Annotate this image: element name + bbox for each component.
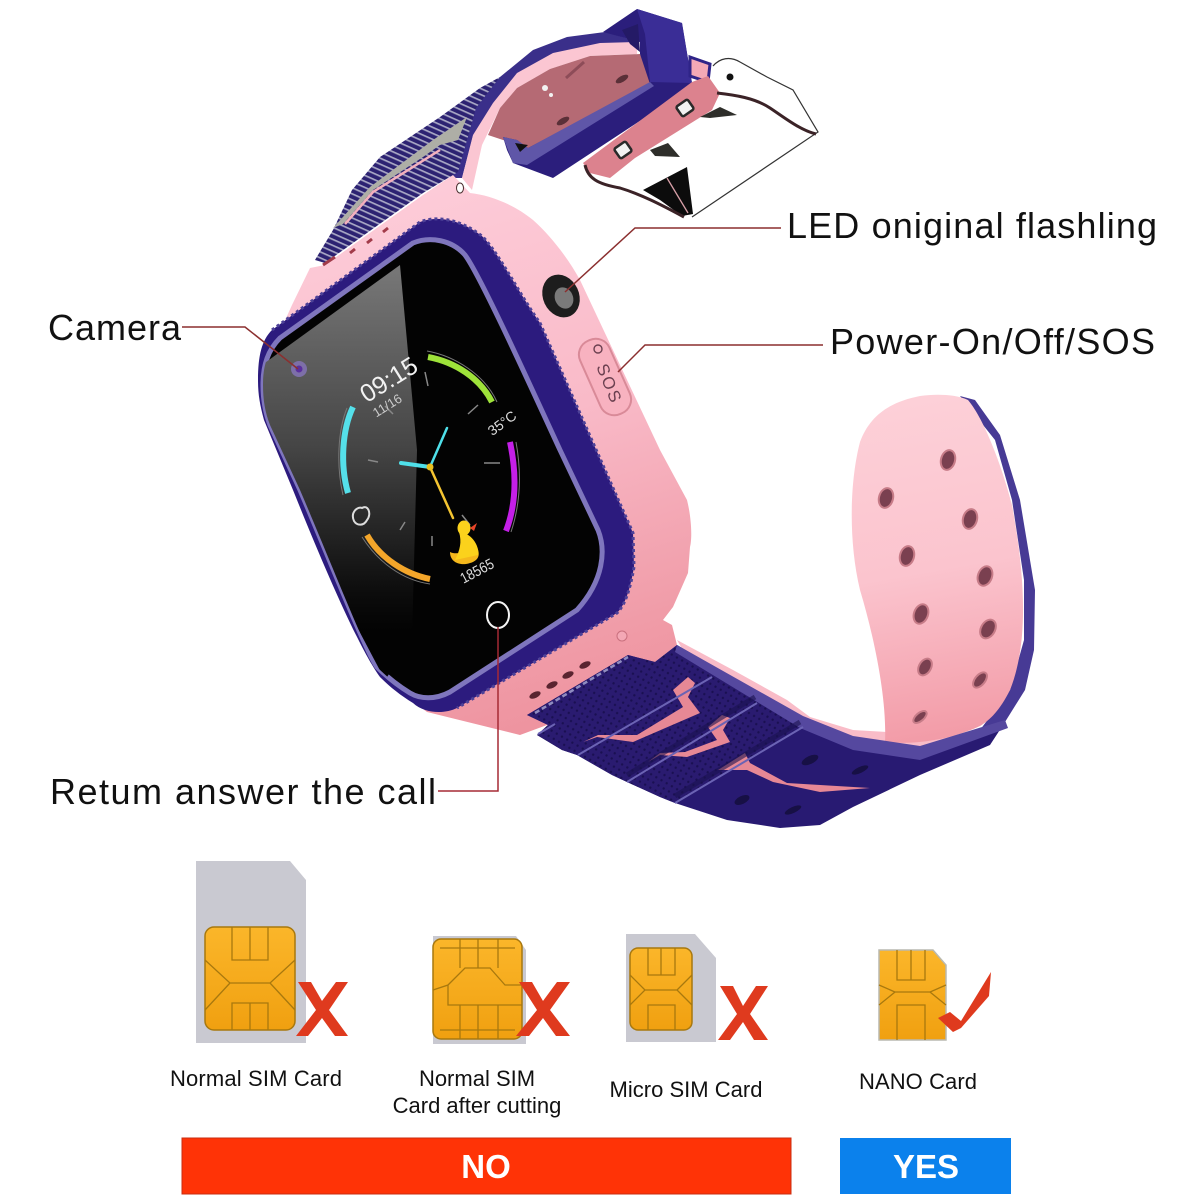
callout: answer call bbox=[50, 627, 498, 812]
strap slots bbox=[528, 660, 592, 700]
step count: 18565 bbox=[457, 555, 497, 587]
icon: red cross bbox=[516, 982, 570, 1036]
micro SIM chip bbox=[630, 948, 692, 1030]
YES bar: YES bbox=[893, 1148, 959, 1185]
temperature: 35°C bbox=[485, 407, 519, 439]
watch screen bbox=[263, 240, 602, 698]
screen glare bbox=[255, 265, 417, 680]
SIM option: micro bbox=[610, 934, 768, 1102]
NO bar bbox=[182, 1138, 791, 1194]
cut SIM body bbox=[433, 936, 526, 1044]
watch hands bbox=[401, 428, 453, 518]
icon: front camera bbox=[291, 361, 307, 377]
icon: red check bbox=[938, 972, 991, 1032]
icon: cloud bbox=[353, 507, 369, 525]
watch illustration bbox=[255, 9, 1035, 828]
NO bar: NO bbox=[461, 1148, 511, 1185]
metal pin bbox=[617, 631, 627, 641]
icon: LED flash bbox=[535, 268, 587, 324]
strap pink traces bbox=[583, 677, 700, 742]
lower strap front bbox=[527, 645, 1008, 828]
watch case bbox=[258, 175, 691, 735]
callout: power button bbox=[618, 321, 1155, 372]
icon: duck bbox=[450, 520, 479, 564]
label: NANO Card bbox=[859, 1069, 977, 1094]
label: Normal SIM Card bbox=[170, 1066, 342, 1091]
callout: LED: LED oniginal flashling bbox=[787, 205, 1157, 246]
watch dial bbox=[339, 351, 519, 587]
label: Card after cutting bbox=[393, 1093, 561, 1118]
callout: LED bbox=[565, 205, 1157, 292]
SOS button bbox=[574, 334, 636, 420]
icon: red cross bbox=[296, 982, 348, 1036]
time: 09:15 bbox=[355, 352, 423, 408]
YES bar bbox=[840, 1138, 1011, 1194]
SIM option: nano bbox=[859, 950, 991, 1094]
label: Normal SIM bbox=[419, 1066, 535, 1091]
micro SIM body bbox=[626, 934, 716, 1042]
icon: home button bbox=[487, 602, 509, 628]
label: Micro SIM Card bbox=[610, 1077, 762, 1102]
SOS button: SOS bbox=[592, 361, 626, 407]
date: 11/16 bbox=[370, 391, 405, 420]
SIM option: normal bbox=[170, 861, 348, 1091]
case hole bbox=[456, 183, 464, 193]
normal SIM chip bbox=[205, 927, 295, 1030]
nano SIM chip bbox=[879, 950, 946, 1040]
lower strap inner bbox=[677, 395, 1035, 760]
strap dashes bbox=[323, 228, 388, 265]
normal SIM card body bbox=[196, 861, 306, 1043]
upper strap bbox=[315, 32, 640, 263]
watch bezel bbox=[258, 219, 634, 712]
strap clasp bbox=[583, 57, 818, 217]
callout: camera: Camera bbox=[48, 307, 182, 348]
callout: camera bbox=[48, 307, 298, 369]
cut SIM chip bbox=[433, 939, 522, 1039]
callout: power button: Power-On/Off/SOS bbox=[830, 321, 1155, 362]
SIM option: cut bbox=[393, 936, 570, 1118]
buckle keeper bbox=[488, 9, 692, 178]
callout: answer call: Retum answer the call bbox=[50, 771, 436, 812]
icon: red cross bbox=[718, 986, 768, 1040]
